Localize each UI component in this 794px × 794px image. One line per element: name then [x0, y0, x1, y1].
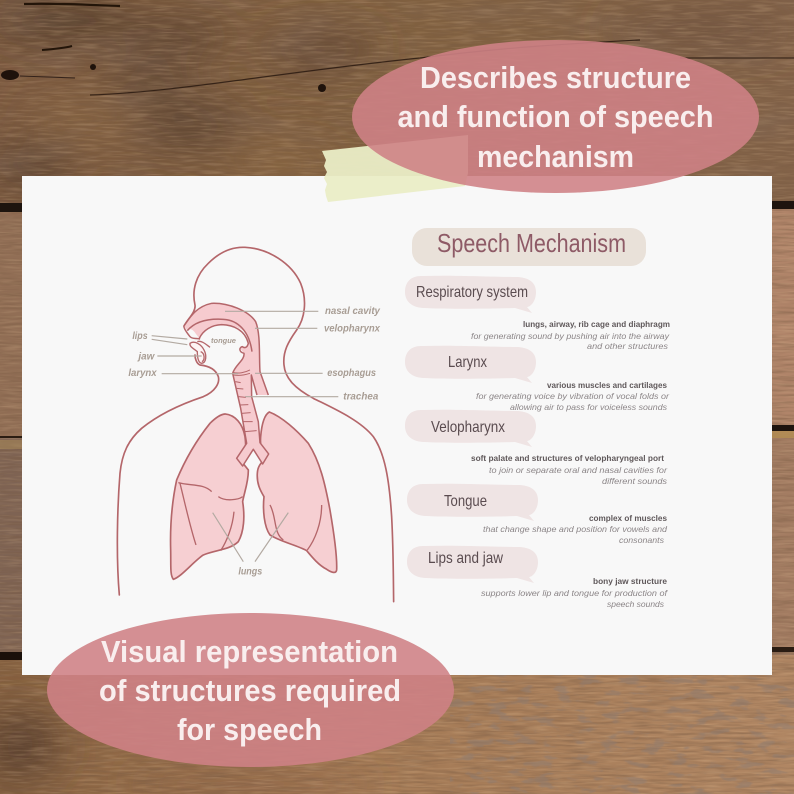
section: respiratory system: Respiratory system: [416, 284, 528, 301]
section: velopharynx: to join or separate oral and nasal cavities for: [489, 465, 668, 475]
airway outline: [184, 303, 269, 466]
lung: left: [171, 414, 248, 579]
lung: right: [257, 412, 337, 572]
labels: lips: [132, 331, 148, 342]
paper panel: [22, 176, 772, 675]
labels: nasal cavity: [325, 306, 380, 317]
labels: lungs: [238, 566, 263, 577]
airway: [184, 303, 269, 466]
section: lips and jaw: supports lower lip and tongue for production of: [481, 588, 669, 598]
labels: jaw: [136, 351, 156, 362]
callout: bottom ellipse: of structures required: [99, 673, 401, 708]
leader lines: [152, 311, 338, 562]
section: respiratory system: for generating sound by pushing air into the airway: [471, 331, 670, 341]
section: lips and jaw: Lips and jaw: [428, 550, 503, 567]
section: respiratory system: [405, 276, 670, 351]
section: velopharynx: Velopharynx: [431, 419, 505, 436]
section: velopharynx: soft palate and structures of velopharyngeal port: [471, 453, 664, 463]
callout: bottom ellipse: for speech: [177, 712, 322, 747]
section: velopharynx: different sounds: [602, 476, 668, 486]
title pill: [412, 228, 646, 266]
section: tongue: complex of muscles: [589, 513, 667, 523]
section: larynx: various muscles and cartilages: [547, 380, 667, 390]
section: lips and jaw: bony jaw structure: [593, 576, 667, 586]
title pill: Speech Mechanism: [437, 228, 626, 258]
section: larynx: for generating voice by vibration of vocal folds or: [476, 391, 670, 401]
section: lips and jaw: speech sounds: [607, 599, 665, 609]
section: velopharynx: [405, 410, 668, 486]
labels: esophagus: [327, 368, 376, 379]
callout: top ellipse: mechanism: [477, 139, 634, 174]
labels: velopharynx: [324, 324, 380, 335]
section: tongue: [407, 484, 667, 545]
section: lips and jaw: [407, 546, 669, 609]
section: larynx: allowing air to pass for voiceless sounds: [510, 402, 668, 412]
section: larynx: [405, 346, 670, 412]
section: larynx: Larynx: [448, 354, 487, 371]
callout: top ellipse: [352, 40, 759, 193]
labels: larynx: [128, 368, 157, 379]
section: tongue: Tongue: [444, 493, 487, 510]
callout: bottom ellipse: [47, 613, 454, 767]
section: respiratory system: lungs, airway, rib cage and diaphragm: [523, 319, 670, 329]
anatomy diagram: [117, 247, 394, 602]
section: tongue: that change shape and position for vowels and: [483, 524, 667, 534]
section: tongue: consonants: [619, 535, 665, 545]
lung fissures: [178, 483, 322, 551]
body outline: [117, 247, 394, 602]
mouth and jaw: [190, 341, 210, 363]
labels: tongue: [211, 336, 236, 345]
callout: top ellipse: Describes structure: [420, 60, 691, 95]
callout: bottom ellipse: Visual representation: [101, 634, 398, 669]
washi tape: [322, 135, 468, 202]
section: respiratory system: and other structures: [587, 341, 669, 351]
labels: trachea: [343, 391, 379, 402]
larynx bands and tracheal rings: [233, 370, 257, 432]
callout: top ellipse: and function of speech: [398, 99, 714, 134]
labels: [128, 306, 380, 577]
